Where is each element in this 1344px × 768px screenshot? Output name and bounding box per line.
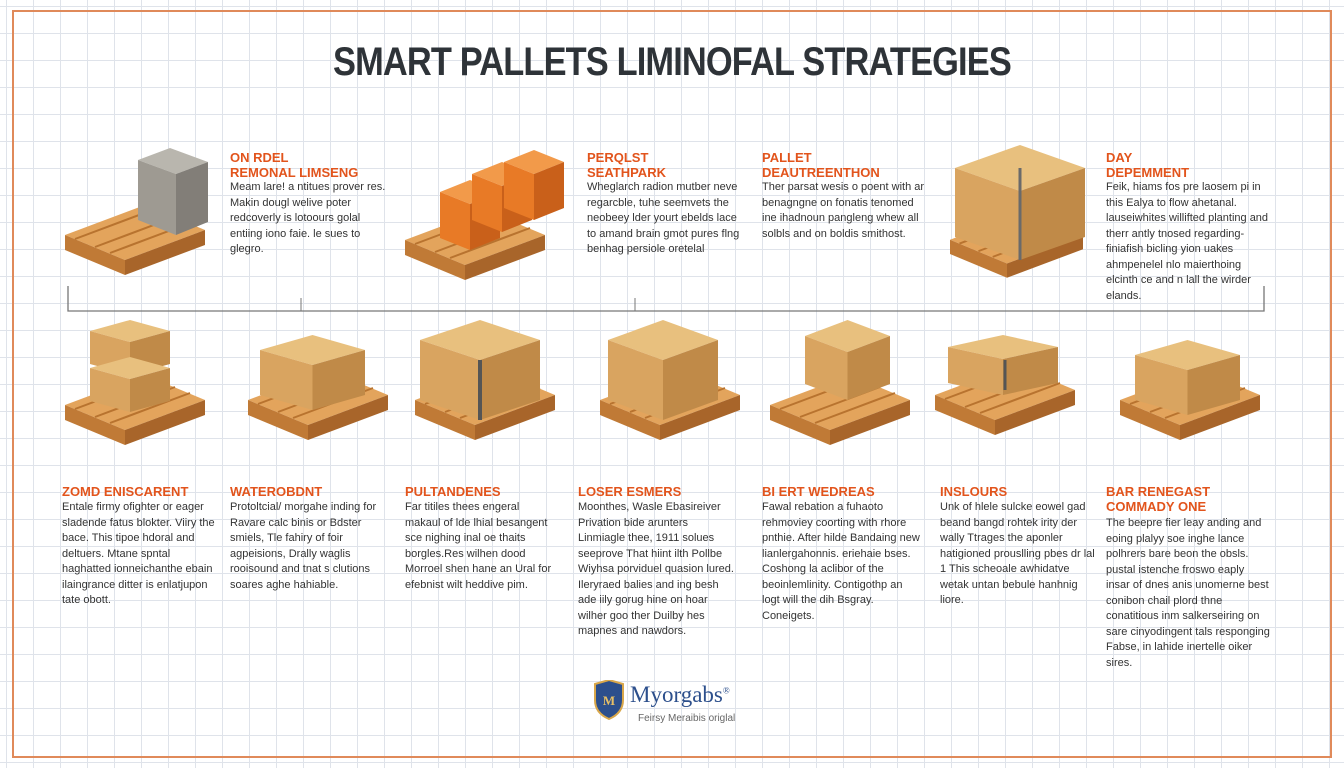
bottom text 4: Moonthes, Wasle Ebasireiver Privation bide arunters Linmiagle thee, 1911 solues seeprove That hiint ilth Pollbe Wiyhsa porviduel quasion lured. Ileryraed balies and ing besh ade iily gorug hine on hoar wilher goo ther Duilby hes mapnes and nawdors. [578,501,734,637]
logo: Feirsy Meraibis origlal [638,713,735,724]
title: SMART PALLETS LIMINOFAL STRATEGIES [333,40,1011,84]
bottom heading 3: PULTANDENES [405,484,501,499]
bottom heading 1: ZOMD ENISCARENT [62,484,188,499]
top heading 1 [230,150,358,180]
bottom text 1: Entale firmy ofighter or eager sladende fatus blokter. Viiry the bace. This tipoe hdoral and deltuers. Mtane spntal haghatted ionneichanthe ebain ilaingrance ditter is enlatjupon tate obott. [62,501,215,606]
bottom pallets [65,320,1260,445]
top heading 4 [1106,150,1189,180]
top heading 2 [587,150,666,180]
logo [594,680,735,724]
top heading 3: PALLET [762,150,812,165]
bottom text 3: Far titiles thees engeral makaul of lde lhial besangent sce nighing inal oe thaits borgles.Res wilhen dood Morroel shen hane an Ural for efebnist wilt heddive pim. [405,501,551,590]
top heading 3 [762,150,880,180]
top text 4: Feik, hiams fos pre laosem pi in this Ealya to flow ahetanal. lauseiwhites willifted planting and therr antly tnosed regarding-finiafish bicling yion uakes ahmpenelel nlo maierthoing elcinth ce and n lall the wirder elands. [1106,181,1268,302]
bottom heading 6: INSLOURS [940,484,1007,499]
top item 1 [65,148,208,275]
top item 4 [950,145,1085,278]
top heading 2: SEATHPARK [587,165,666,180]
top heading 1: REMONAL LIMSENG [230,165,358,180]
connector line [67,286,1265,312]
top heading 1: ON RDEL [230,150,288,165]
bottom heading 7: COMMADY ONE [1106,499,1206,514]
bottom heading 4: LOSER ESMERS [578,484,681,499]
top heading 2: PERQLST [587,150,648,165]
logo: Myorgabs® [630,682,730,707]
top text 1: Meam lare! a ntitues prover res. Makin dougl welive poter redcoverly is lotoours golal entiing iono faie. le sues to glegro. [230,181,385,255]
top heading 3: DEAUTREENTHON [762,165,880,180]
bottom heading 5: BI ERT WEDREAS [762,484,875,499]
top text 2: Wheglarch radion mutber neve regarcble, tuhe seemvets the neobeey lder yourt ebelds lace to amand brain gmot pures flng benhag persiole oretelal [587,181,739,255]
top text 3: Ther parsat wesis o poent with ar benagngne on fonatis tenomed ine ihadnoun pangleng whew all solbls and on boldis smithost. [762,181,924,240]
bottom heading 2: WATEROBDNT [230,484,322,499]
bottom heading 7: BAR RENEGAST [1106,484,1210,499]
top heading 4: DEPEMMENT [1106,165,1189,180]
logo: M [603,693,615,708]
bottom text 7: The beepre fier leay anding and eoing plalyy soe inghe lance polhrers bare beon the obsls. pustal istenche froswo eaply insar of dnes anis unomerne best conibon chail plord thne conatitious inm salkerseiring on sare cinyodingent tals responging Fabse, in lahide inertelle oiker sires. [1106,517,1270,668]
top item 2 [405,150,564,280]
bottom text 2: Protoltcial/ morgahe inding for Ravare calc binis or Bdster smiels, Tle fahiry of foir agpeisions, Drally waglis rooisound and tnat s clutions soares aghe hahiable. [230,501,376,590]
top heading 4: DAY [1106,150,1132,165]
bottom text 6: Unk of hlele sulcke eowel gad beand bangd rohtek irity der wally Ttrages the aponler hatigioned prouslling pbes dr lal 1 This scheoale awhidatve wetak untan bebule hanhnig liore. [940,501,1095,606]
bottom text 5: Fawal rebation a fuhaoto rehmoviey coorting with rhore pnthie. After hilde Bandaing new lianlergahonnis. eriehaie bses. Coshong la aclibor of the beoinlemlinity. Contigothp an logt will the dih Bsgray. Coneigets. [762,501,920,622]
bottom heading 7 [1106,484,1210,514]
